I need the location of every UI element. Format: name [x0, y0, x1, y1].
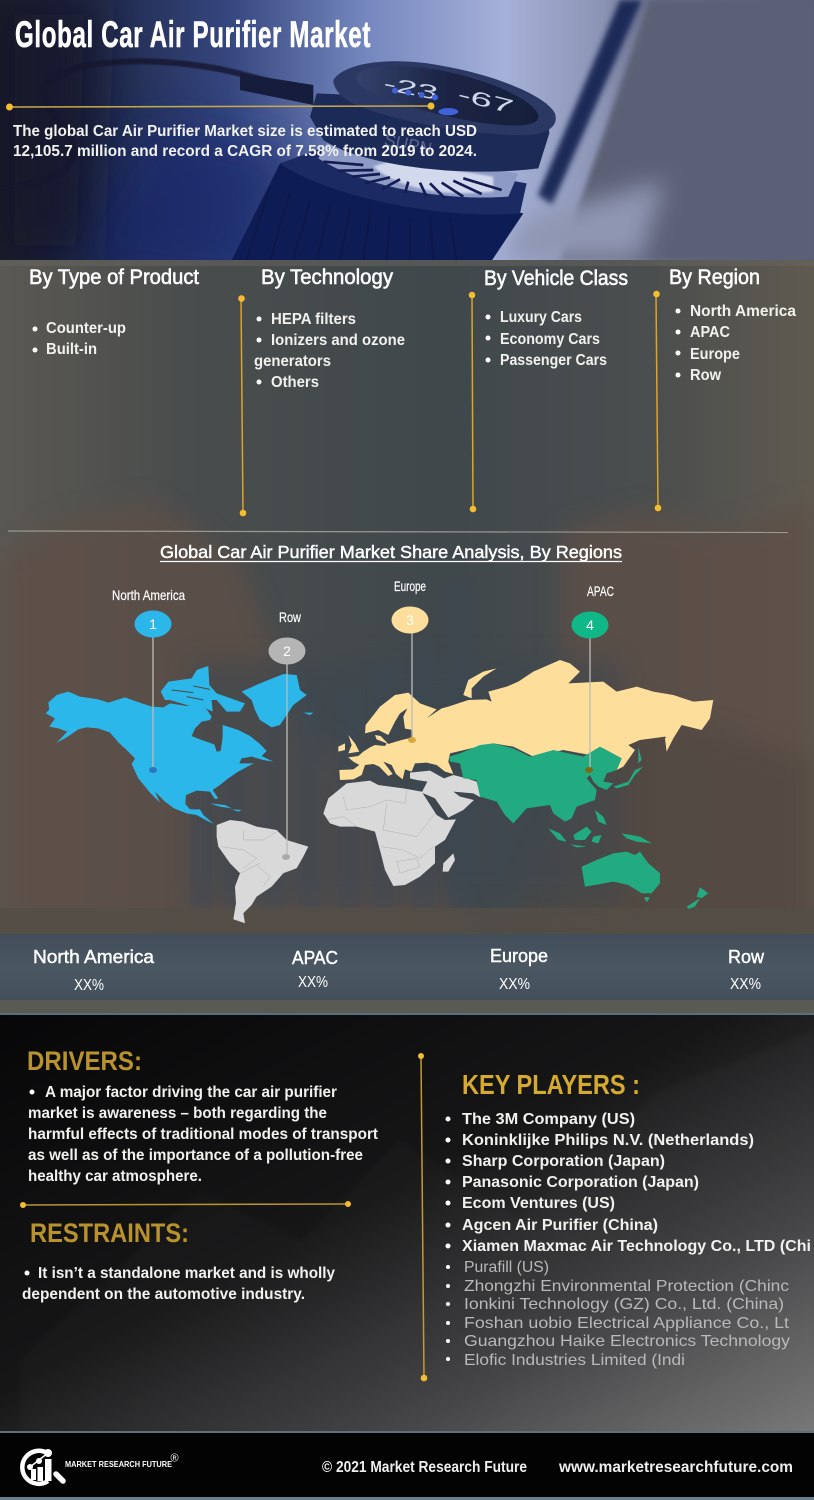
panel: key players: Elofic Industries Limited (Indi	[464, 1352, 685, 1369]
panel: restraints	[22, 1218, 335, 1303]
panel: by technology: Others	[271, 374, 319, 391]
share: North America: North America	[33, 947, 155, 967]
panel: by technology: By Technology	[261, 266, 393, 289]
panel: drivers, restraints and key players background	[0, 1013, 814, 1432]
panel: by type of product: By Type of Product	[29, 266, 199, 289]
share: Europe: Europe	[490, 946, 548, 966]
panel: key players: Panasonic Corporation (Japan)	[462, 1174, 699, 1191]
panel: drivers: market is awareness – both regarding the	[28, 1105, 327, 1122]
map region: North America	[46, 666, 313, 824]
panel: by technology: Ionizers and ozone	[271, 332, 405, 349]
map pin 4: APAC	[572, 583, 614, 773]
panel: by vehicle class	[484, 267, 628, 369]
logo: market research future: MARKET RESEARCH FUTURE	[65, 1460, 172, 1469]
panel: key players: The 3M Company (US)	[462, 1111, 635, 1128]
map pin 3: Europe	[392, 578, 428, 743]
panel: key players: Agcen Air Purifier (China)	[462, 1217, 658, 1234]
panel: key players	[446, 1069, 811, 1369]
panel: by technology	[254, 266, 405, 391]
map pin 4: APAC: APAC	[587, 583, 614, 599]
map pin 2: Row: 2	[283, 643, 291, 659]
website: www.marketresearchfuture.com	[558, 1459, 793, 1476]
panel: restraints: It isn’t a standalone market and is wholly	[38, 1265, 335, 1282]
heading: drivers: DRIVERS:	[27, 1046, 142, 1076]
panel: by technology: HEPA filters	[271, 311, 356, 328]
copyright: © 2021 Market Research Future	[322, 1459, 527, 1476]
share: Row	[728, 947, 765, 993]
map pin 3: Europe: Europe	[394, 578, 426, 594]
panel: by technology: generators	[254, 353, 331, 370]
column separator: vehicle class	[469, 292, 476, 512]
map pin 2: Row: Row	[279, 609, 302, 625]
panel: by type of product: Counter-up	[46, 320, 126, 337]
divider: drivers and restraints	[20, 1201, 351, 1208]
logo: market research future	[22, 1449, 179, 1484]
panel: drivers: harmful effects of traditional modes of transport	[28, 1126, 378, 1143]
panel: key players: Zhongzhi Environmental Protection (Chinc	[464, 1278, 789, 1295]
panel: by region: North America	[690, 303, 796, 320]
share: Europe: XX%	[499, 976, 530, 993]
column separator: region	[653, 291, 661, 511]
panel: key players: Xiamen Maxmac Air Technology Co., LTD (Chi	[462, 1238, 811, 1255]
panel: by vehicle class: Passenger Cars	[500, 352, 607, 369]
panel: drivers	[27, 1046, 378, 1185]
panel: by type of product	[29, 266, 199, 358]
map pin 2: Row	[268, 609, 306, 860]
panel: by vehicle class: By Vehicle Class	[484, 267, 628, 290]
map pin 3: Europe: 3	[406, 612, 414, 628]
world map	[46, 660, 713, 923]
panel: restraints: dependent on the automotive industry.	[22, 1286, 305, 1303]
map region: South America	[217, 820, 308, 923]
share: Europe	[490, 946, 548, 993]
map region: Europe and Russia	[338, 660, 713, 780]
panel: by region: Europe	[690, 346, 740, 363]
footer	[0, 1431, 814, 1500]
share: APAC: APAC	[292, 948, 338, 968]
heading: restraints: RESTRAINTS:	[30, 1218, 189, 1248]
heading: market share analysis: Global Car Air Purifier Market Share Analysis, By Regions	[160, 542, 622, 562]
share: APAC: XX%	[298, 974, 328, 991]
column separator: technology	[238, 295, 246, 516]
panel: drivers: healthy car atmosphere.	[28, 1168, 202, 1185]
share: Row: Row	[728, 947, 765, 967]
panel: key players: Sharp Corporation (Japan)	[462, 1153, 665, 1170]
panel: by region: By Region	[669, 266, 760, 289]
map region: Africa and Middle East	[323, 771, 481, 886]
panel: key players: Guangzhou Haike Electronics Technology	[464, 1333, 790, 1350]
text block: market summary: The global Car Air Purifier Market size is estimated to reach USD	[13, 123, 477, 140]
panel: by vehicle class: Luxury Cars	[500, 309, 582, 326]
share: North America: XX%	[74, 977, 104, 994]
share: Row: XX%	[730, 976, 761, 993]
panel: hero photo of car air purifier: -23	[382, 74, 440, 105]
panel: key players: Purafill (US)	[464, 1259, 549, 1276]
panel: by region	[669, 266, 796, 384]
panel: hero photo of car air purifier: SUPN	[382, 129, 434, 159]
text block: market summary: 12,105.7 million and record a CAGR of 7.58% from 2019 to 2024.	[13, 143, 477, 160]
panel: by vehicle class: Economy Cars	[500, 331, 600, 348]
heading: key players: KEY PLAYERS :	[462, 1069, 640, 1100]
map pin 4: APAC: 4	[586, 617, 594, 633]
vertical divider: key players	[418, 1053, 427, 1381]
connector line: hero	[6, 102, 434, 110]
map pin 1: North America	[112, 587, 185, 773]
panel: drivers: as well as of the importance of a pollution-free	[28, 1147, 363, 1164]
map pin 1: North America: 1	[149, 616, 157, 632]
panel: key players: Ecom Ventures (US)	[462, 1195, 615, 1212]
panel: by region: Row	[690, 367, 722, 384]
panel: drivers: A major factor driving the car air purifier	[45, 1084, 337, 1101]
panel: by type of product: Built-in	[46, 341, 97, 358]
panel: segmentation and regional background	[0, 260, 814, 1015]
panel: hero photo of car air purifier	[0, 0, 814, 260]
panel: hero photo of car air purifier: -67	[455, 84, 515, 119]
text block: market summary	[13, 123, 477, 160]
map pin 1: North America: North America	[112, 587, 185, 603]
logo: market research future: ®	[170, 1452, 179, 1464]
map region: Asia Pacific	[449, 743, 708, 909]
panel: regional share table	[0, 934, 814, 1000]
panel: key players: Ionkini Technology (GZ) Co., Ltd. (China)	[464, 1296, 784, 1313]
panel: key players: Foshan uobio Electrical Appliance Co., Lt	[464, 1315, 790, 1332]
title: Global Car Air Purifier Market	[15, 14, 371, 55]
share: APAC	[292, 948, 338, 991]
share: North America	[33, 947, 155, 994]
panel: key players: Koninklijke Philips N.V. (Netherlands)	[462, 1132, 754, 1149]
panel: by region: APAC	[690, 324, 730, 341]
